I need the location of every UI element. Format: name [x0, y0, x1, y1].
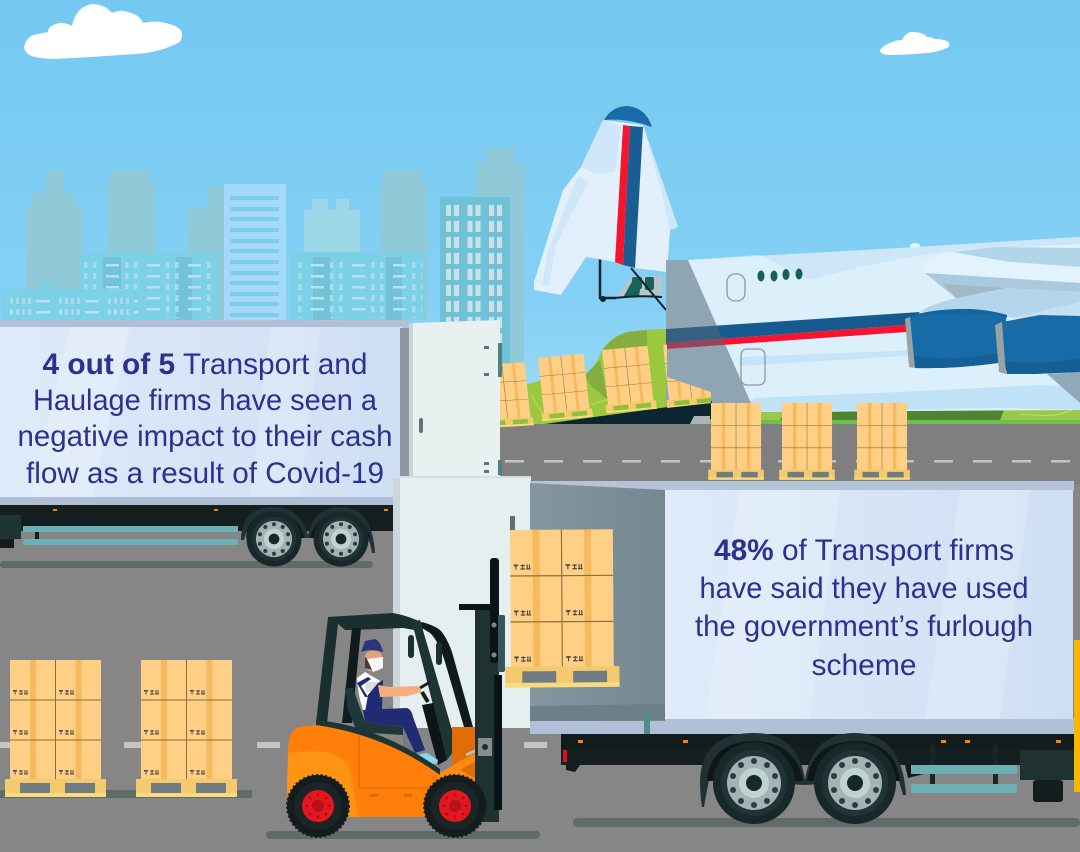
box stack right — [136, 660, 237, 797]
driver — [357, 639, 447, 770]
stat text: 4 out of 5: Haulage firms have seen a — [33, 384, 377, 417]
lorry 2: open door — [393, 476, 531, 728]
wing — [920, 245, 1080, 318]
lorry 1: ground shadow — [0, 561, 373, 568]
tail strut and nose gear — [600, 258, 666, 310]
front fender and piston — [440, 752, 481, 784]
doors — [727, 274, 765, 385]
stat text: 48%: scheme — [812, 649, 916, 682]
ramp with boxes — [500, 344, 712, 428]
forklift ground shadow — [266, 831, 540, 839]
lorry 2: ground shadow — [573, 818, 1080, 827]
body — [287, 725, 483, 817]
stat text: 48%: have said they have used — [700, 572, 1028, 605]
box stack left — [5, 660, 106, 797]
lorry 2: chassis — [561, 640, 1080, 802]
cargo plane — [534, 106, 1080, 412]
lorry 2: wheels — [700, 733, 906, 824]
stat text: 4 out of 5: flow as a result of Covid-19 — [26, 457, 384, 490]
low buildings left — [1, 252, 218, 320]
rear wheel — [287, 775, 349, 837]
windows — [758, 268, 802, 282]
dash panel — [452, 727, 475, 777]
green hill behind plane — [500, 329, 670, 424]
cloud: top left — [24, 4, 182, 59]
airfield box stacks — [708, 403, 910, 480]
lorry 1: chassis — [0, 505, 393, 548]
runway band — [500, 424, 1080, 484]
sky background — [0, 0, 1080, 430]
mast — [459, 558, 505, 822]
box stack on forks — [504, 529, 620, 688]
stat text: 48%: the government’s furlough — [695, 610, 1033, 643]
cloud: top right — [880, 32, 949, 55]
lower ground — [0, 424, 1080, 852]
city skyline — [1, 148, 524, 385]
stat text: 48% — [695, 534, 1033, 682]
seat — [345, 688, 403, 735]
dorsal bump — [910, 243, 920, 249]
low buildings right — [290, 252, 424, 320]
slatted tower — [224, 184, 286, 320]
stat text: 4 out of 5: 4 out of 5 Transport and — [42, 348, 368, 381]
fuselage stripes — [666, 312, 920, 343]
lorry 1: wheels — [241, 507, 375, 566]
underwing fairing — [1047, 372, 1080, 403]
airfield grass — [700, 408, 1080, 424]
fuselage lower belly — [740, 385, 1080, 412]
engine 1 — [905, 309, 1007, 368]
back skyscrapers — [26, 148, 524, 385]
windowed block — [440, 197, 510, 372]
stat text: 4 out of 5: negative impact to their cash — [18, 420, 392, 453]
road markings lower — [0, 742, 547, 748]
road markings upper — [505, 460, 1070, 462]
front wheel — [424, 775, 486, 837]
lorry 1: trailer — [0, 320, 408, 568]
stat text: 48%: 48% of Transport firms — [714, 534, 1014, 567]
fuselage — [666, 237, 1080, 412]
forklift — [287, 558, 505, 837]
fuselage upper shade — [688, 237, 1080, 280]
pale tower — [304, 199, 360, 320]
ground shadow under pallets — [0, 790, 252, 798]
open trailer door upper — [400, 320, 502, 478]
rear door shadow — [666, 260, 754, 410]
engine 2 — [995, 315, 1080, 374]
lorry 2: trailer — [530, 481, 1080, 827]
cabin frame — [316, 613, 473, 760]
stat text: 4 out of 5 — [18, 348, 392, 490]
tail fin — [534, 106, 678, 295]
